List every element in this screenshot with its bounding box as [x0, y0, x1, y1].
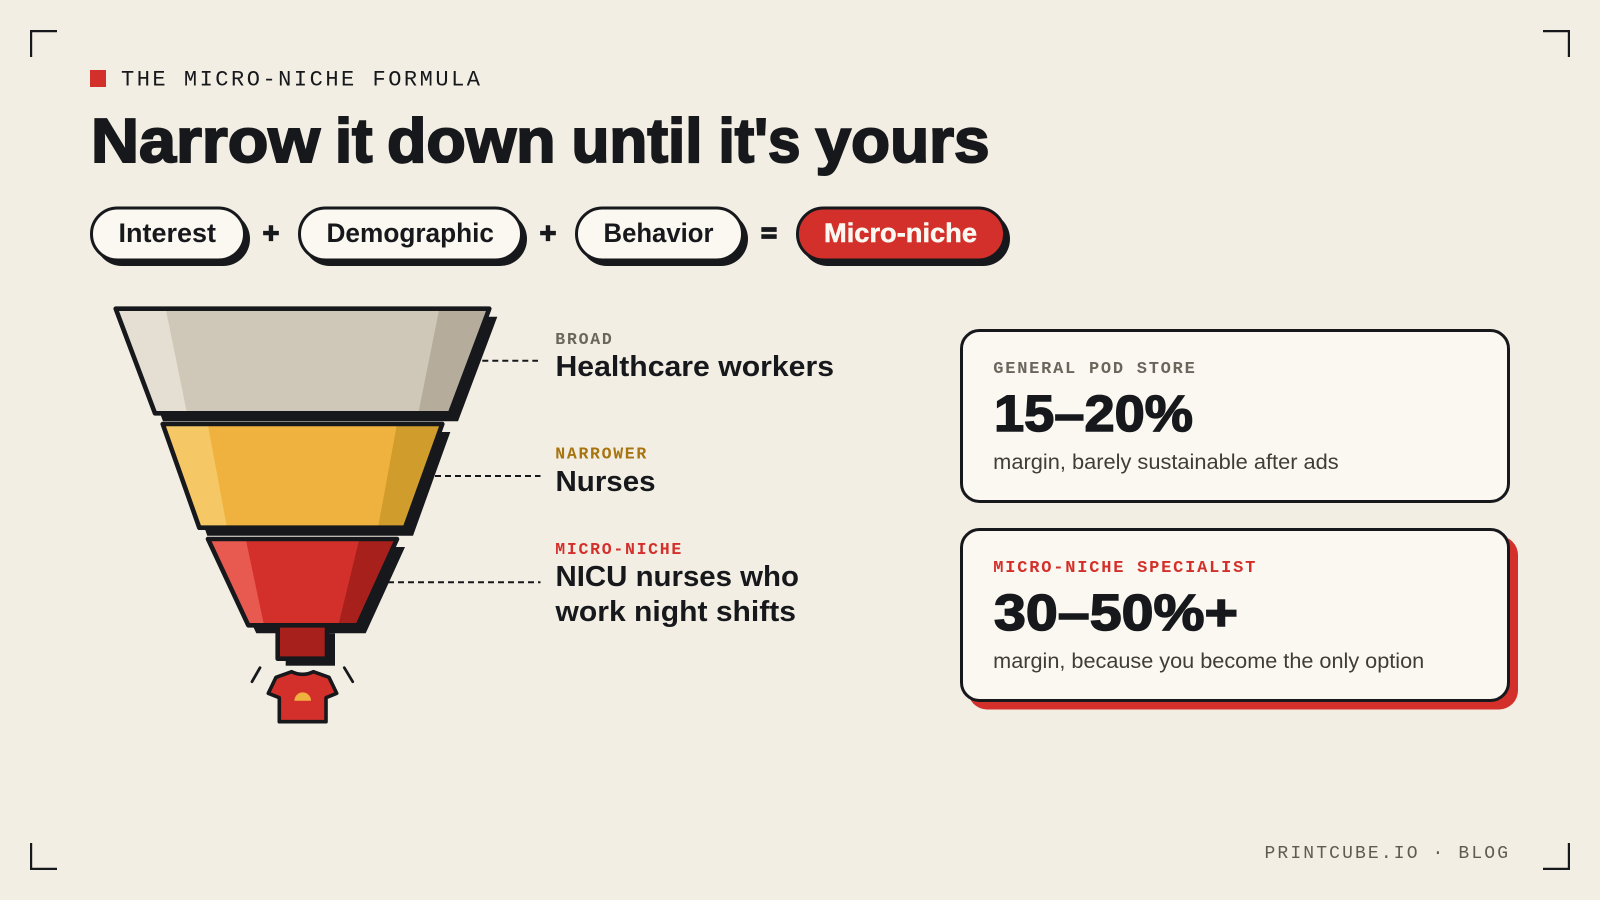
- funnel: [116, 309, 497, 666]
- label: broad: Healthcare workers: [556, 351, 834, 383]
- formula row: [92, 208, 1010, 266]
- funnel tier: broad: [116, 309, 497, 421]
- pill: Micro-niche: Micro-niche: [824, 218, 977, 248]
- card note: margin, barely sustainable after ads: [993, 450, 1339, 474]
- connector lines: [388, 361, 540, 582]
- footer: PRINTCUBE.IO · BLOG: [1264, 844, 1508, 864]
- title: it's: [718, 106, 800, 176]
- funnel tier: micro-niche: [208, 539, 405, 633]
- label: narrower: Nurses: [556, 466, 656, 498]
- card stat: 30–50%+: [994, 584, 1238, 641]
- card: micro-niche specialist: [962, 530, 1518, 710]
- label: broad: [555, 330, 834, 383]
- card label: GENERAL POD STORE: [993, 360, 1195, 379]
- label: broad: BROAD: [555, 330, 612, 349]
- card label: MICRO-NICHE SPECIALIST: [993, 559, 1255, 578]
- title: until: [572, 106, 702, 176]
- pill: Micro-niche: [798, 208, 1010, 266]
- card stat: 15–20%: [994, 385, 1193, 442]
- pill: Behavior: [576, 208, 748, 266]
- card: general POD store: [962, 330, 1508, 502]
- pill: Demographic: Demographic: [326, 218, 494, 248]
- operator: equals: =: [761, 218, 777, 248]
- label: micro-niche: NICU nurses who: [556, 561, 799, 593]
- operator: plus: +: [263, 218, 279, 250]
- pill: Behavior: Behavior: [604, 218, 714, 248]
- label: micro-niche: [554, 540, 799, 628]
- label: narrower: [555, 445, 656, 498]
- funnel neck: [278, 625, 335, 666]
- title: yours: [816, 106, 990, 176]
- pill: Interest: [92, 208, 250, 266]
- label: micro-niche: MICRO-NICHE: [555, 540, 681, 559]
- operator: plus: +: [540, 218, 556, 250]
- title: it: [335, 106, 373, 176]
- title: down: [387, 106, 556, 176]
- card note: margin, because you become the only option: [993, 649, 1424, 673]
- label: micro-niche: work night shifts: [554, 596, 796, 628]
- title: [91, 106, 990, 176]
- label: narrower: NARROWER: [555, 445, 646, 464]
- icon: t-shirt output: [252, 668, 353, 722]
- funnel tier: narrower: [163, 424, 450, 536]
- title: Narrow: [91, 106, 320, 176]
- pill: Interest: Interest: [118, 218, 216, 248]
- pill: Demographic: [300, 208, 527, 266]
- eyebrow: THE MICRO-NICHE FORMULA: [121, 68, 481, 92]
